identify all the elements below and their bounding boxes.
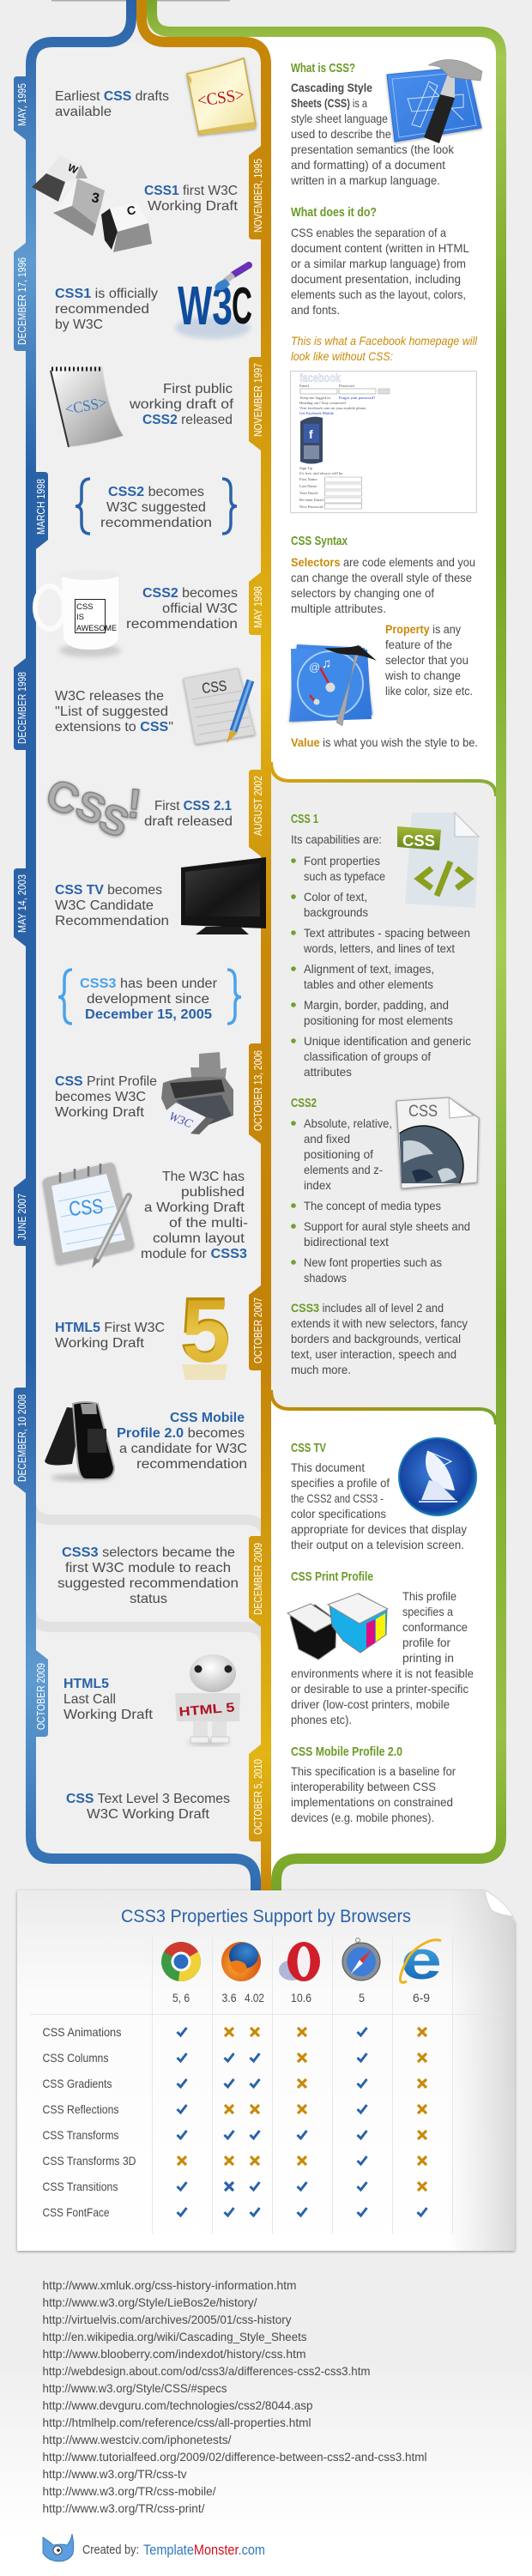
date tags: OCTOBER 13, 2006 <box>252 1050 264 1131</box>
event: CSS2 official: recommendation <box>126 617 238 632</box>
CSS mobile profile section <box>291 1745 456 1824</box>
event: multi-column layout: The W3C has <box>162 1170 245 1184</box>
CSS syntax section <box>289 534 478 749</box>
source links: http://en.wikipedia.org/wiki/Cascading_Style_Sheets <box>43 2330 307 2343</box>
icon: document with pencil: CSS <box>201 678 227 697</box>
icon: W3C logo with brush: W3 <box>178 275 233 336</box>
event: CSS1 first working draft: Working Draft <box>148 199 239 214</box>
timeline events <box>32 58 266 1822</box>
event: CSS3 selectors: status <box>130 1592 167 1606</box>
what does it do section: or a similar markup language) from <box>291 257 466 270</box>
support matrix <box>177 2028 427 2216</box>
footer credit: TemplateMonster.com <box>143 2542 265 2558</box>
CSS TV section: their output on a television screen. <box>291 1538 464 1551</box>
what is CSS section <box>290 61 455 187</box>
icon: flip phone <box>45 1402 114 1481</box>
browser version labels: 4.02 <box>245 1991 264 2005</box>
source links <box>43 2278 427 2515</box>
event: multi-column layout: a Working Draft <box>144 1200 245 1215</box>
CSS 1 capability list: attributes <box>304 1065 352 1079</box>
CSS 1 capability list: Font properties <box>304 854 380 868</box>
what is CSS section: presentation semantics (the look <box>291 142 455 156</box>
table title: CSS3 Properties Support by Browsers <box>121 1907 411 1926</box>
source links: http://www.w3.org/TR/css-tv <box>43 2467 187 2481</box>
what is CSS section: used to describe the <box>291 127 391 141</box>
CSS 1 capability list: words, letters, and lines of text <box>303 941 455 955</box>
event: earliest drafts: available <box>55 105 112 119</box>
CSS syntax section: selector that you <box>385 653 469 667</box>
event: earliest drafts <box>55 58 256 135</box>
CSS2 section: CSS2 <box>291 1096 317 1110</box>
CSS 1 capability list: classification of groups of <box>304 1049 431 1063</box>
CSS syntax section: like color, size etc. <box>385 684 473 698</box>
icon: W3C keyboard keys <box>32 155 152 252</box>
event: CSS print profile: becomes W3C <box>55 1090 146 1104</box>
what does it do section: CSS enables the separation of a <box>291 226 446 239</box>
CSS syntax section: CSS Syntax <box>291 534 348 548</box>
what is CSS section: What is CSS? <box>291 61 355 76</box>
CSS TV section: specifies a profile of <box>291 1476 390 1490</box>
event: CSS mobile profile: recommendation <box>136 1457 247 1472</box>
event: CSS1 first working draft: CSS1 first W3C <box>144 184 238 198</box>
browser version labels <box>172 1991 430 2005</box>
CSS2 capability list: index <box>304 1178 331 1192</box>
row labels <box>43 2025 136 2219</box>
source links: http://www.blooberry.com/indexdot/history/css.htm <box>43 2347 305 2361</box>
icon: printer <box>154 1052 233 1134</box>
CSS print profile section <box>287 1569 474 1726</box>
CSS print profile section: This profile <box>402 1589 456 1603</box>
source links: http://www.tutorialfeed.org/2009/02/difference-between-css2-and-css3.html <box>43 2450 427 2464</box>
icon: parchment scroll: <CSS> <box>196 86 245 111</box>
source links: http://www.devguru.com/technologies/css2/8044.asp <box>43 2398 313 2412</box>
icon: CSS file with globe <box>395 1097 481 1191</box>
CSS syntax section: wish to change <box>384 668 461 682</box>
browser version labels: 6-9 <box>413 1991 430 2005</box>
browser version labels: 5 <box>359 1991 365 2005</box>
what is CSS section: and formatting) of a document <box>291 158 445 172</box>
event: CSS2 official: CSS2 becomes <box>142 586 238 601</box>
event: CSS2 official <box>35 570 238 657</box>
event: HTML5 last call: Last Call <box>63 1692 116 1707</box>
CSS2 capability list <box>304 1116 470 1285</box>
CSS 1 section <box>291 812 479 1265</box>
facebook unstyled screenshot: Forgot your password? <box>339 396 375 400</box>
date tags: MARCH 1998 <box>35 479 47 535</box>
icon: document with pencil <box>184 668 255 744</box>
icon: robot holding HTML 5 sign <box>175 1654 240 1745</box>
facebook caption <box>291 334 478 363</box>
browser version labels: 10.6 <box>291 1991 311 2005</box>
event: multi-column layout <box>43 1163 248 1268</box>
icon: 3D CSS letters: S <box>93 795 135 847</box>
event: HTML5 first working draft: HTML5 First W3C <box>55 1321 165 1335</box>
CSS 1 capability list: tables and other elements <box>304 977 433 991</box>
event: CSS TV: Recommendation <box>55 914 169 928</box>
event: CSS3 under development: CSS3 has been under <box>80 977 218 991</box>
footer credit <box>43 2534 265 2561</box>
icon: CSS is awesome mug: CSS <box>76 602 94 612</box>
CSS3 paragraph: extends it with new selectors, fancy <box>291 1316 468 1330</box>
facebook unstyled screenshot: It's free, and always will be. <box>299 471 343 476</box>
what does it do section: document content (written in HTML <box>291 241 469 255</box>
blue timeline line <box>31 0 256 1893</box>
icon: safari <box>342 1938 380 1980</box>
panel: profiles background <box>271 1390 496 1881</box>
icon: 3D CSS letters: C <box>39 769 86 825</box>
icon: 3D CSS letters: S <box>70 782 112 834</box>
event: HTML5 last call: Working Draft <box>63 1708 154 1722</box>
CSS print profile section: phones etc). <box>291 1713 352 1726</box>
source links: http://www.xmluk.org/css-history-information.htm <box>43 2278 297 2292</box>
CSS2 capability list: bidirectional text <box>304 1235 389 1249</box>
date tags: JUNE 2007 <box>16 1194 28 1240</box>
event: CSS1 recommended <box>55 265 252 339</box>
CSS2 capability list: elements and z- <box>304 1163 383 1176</box>
event: earliest drafts: Earliest CSS drafts <box>55 89 169 104</box>
CSS syntax section: selectors by changing one of <box>291 586 434 600</box>
CSS 1 bullet dots <box>291 858 296 1265</box>
event: HTML5 last call: HTML5 <box>63 1677 109 1691</box>
what does it do section: What does it do? <box>291 205 377 220</box>
facebook unstyled screenshot: f <box>309 427 313 441</box>
date tags: DECEMBER 17, 1996 <box>16 257 28 345</box>
CSS2 capability list: Support for aural style sheets and <box>304 1219 470 1233</box>
event: CSS mobile profile: Profile 2.0 becomes <box>117 1426 245 1441</box>
source links: http://webdesign.about.com/od/css3/a/differences-css2-css3.htm <box>43 2364 371 2378</box>
CSS syntax section: multiple attributes. <box>291 602 386 615</box>
table grid <box>30 1937 502 2234</box>
CSS 1 capability list: Alignment of text, images, <box>304 962 434 976</box>
icon: CSS file with globe: CSS <box>408 1103 438 1121</box>
CSS2 capability list: Absolute, relative, <box>304 1116 392 1130</box>
event: HTML5 last call <box>63 1654 240 1745</box>
facebook unstyled screenshot <box>290 371 477 513</box>
event: CSS mobile profile: CSS Mobile <box>170 1411 245 1425</box>
event: CSS 2.1 draft: First CSS 2.1 <box>154 799 232 813</box>
event: CSS TV: CSS TV becomes <box>55 883 162 898</box>
icon: robot holding HTML 5 sign: HTML 5 <box>178 1700 235 1720</box>
facebook unstyled screenshot: Password <box>339 384 354 388</box>
facebook unstyled screenshot: New Password <box>299 505 323 509</box>
event: CSS2 suggested recommendation <box>76 479 237 534</box>
CSS print profile section: printing in <box>402 1651 454 1665</box>
CSS2 section <box>291 1096 479 1285</box>
event: CSS text level 3 <box>66 1792 230 1822</box>
icon: CSS is awesome mug: IS <box>76 613 84 622</box>
event: HTML5 first working draft <box>55 1279 231 1382</box>
event: CSS TV <box>55 857 266 934</box>
event: multi-column layout: column layout <box>153 1231 245 1246</box>
row labels: CSS Gradients <box>43 2077 112 2090</box>
event: list of suggested extensions: W3C releases the <box>55 689 164 704</box>
row labels: CSS Reflections <box>43 2102 118 2116</box>
event: CSS2 first draft <box>51 366 234 447</box>
icon: firefox <box>221 1942 261 1981</box>
facebook unstyled screenshot: Sign Up <box>299 466 313 470</box>
facebook unstyled screenshot: facebook <box>299 371 341 384</box>
row labels: CSS Transforms 3D <box>43 2154 136 2168</box>
CSS3 paragraph: CSS3 includes all of level 2 and <box>291 1301 444 1315</box>
CSS 1 capability list: Unique identification and generic <box>304 1034 471 1048</box>
icon: CSS is awesome mug: AWESOME <box>76 624 117 633</box>
CSS print profile section: or desirable to use a printer-specific <box>291 1682 469 1696</box>
event: CSS2 official: official W3C <box>162 602 238 616</box>
event: CSS2 first draft: CSS2 released <box>142 413 233 427</box>
timeline grey divider two <box>31 1607 266 1648</box>
green panel line <box>152 0 501 1893</box>
event: CSS2 suggested recommendation: recommendation <box>100 516 212 530</box>
panel: browser support sheet <box>17 1890 515 2251</box>
event: CSS mobile profile: a candidate for W3C <box>119 1442 247 1456</box>
facebook caption: This is what a Facebook homepage will <box>291 334 478 348</box>
facebook unstyled screenshot: Last Name <box>299 484 317 488</box>
what does it do section: elements such as the layout, colors, <box>291 287 466 301</box>
event: HTML5 first working draft: Working Draft <box>55 1336 145 1351</box>
icon: flat screen TV <box>181 857 266 934</box>
source links: http://www.w3.org/Style/LieBos2e/history/ <box>43 2295 257 2309</box>
CSS mobile profile section: This specification is a baseline for <box>291 1764 456 1778</box>
CSS2 capability list: and fixed <box>304 1132 350 1146</box>
CSS 1 capability list: Text attributes - spacing between <box>304 926 470 940</box>
CSS TV section: the CSS2 and CSS3 - <box>291 1491 384 1505</box>
facebook unstyled screenshot: Get Facebook Mobile <box>299 411 334 415</box>
row labels: CSS Transitions <box>43 2180 118 2193</box>
icon: blueprint compass and T-square <box>289 644 377 726</box>
icon: W3C logo with brush: C <box>232 277 252 335</box>
source links: http://www.w3.org/TR/css-print/ <box>43 2501 205 2515</box>
icon: blueprint and hammer <box>387 59 482 143</box>
CSS syntax section: Property is any <box>385 622 461 636</box>
event: CSS print profile <box>55 1052 233 1134</box>
separator: grey to white panel <box>271 1390 496 1424</box>
CSS TV section <box>291 1438 476 1551</box>
event: CSS2 first draft: First public <box>163 382 233 396</box>
icon: monster mascot <box>43 2534 74 2561</box>
CSS mobile profile section: CSS Mobile Profile 2.0 <box>291 1745 402 1759</box>
panel: what is CSS background <box>245 37 496 794</box>
icon: W3C keyboard keys: C <box>125 203 137 218</box>
date tags: OCTOBER 5, 2010 <box>252 1759 264 1835</box>
CSS 1 capability list <box>303 854 471 1079</box>
CSS print profile section: conformance <box>402 1620 468 1634</box>
facebook unstyled screenshot: Your Email <box>299 491 318 495</box>
CSS print profile section: CSS Print Profile <box>291 1569 373 1584</box>
facebook unstyled screenshot: Re-enter Email <box>299 498 324 502</box>
date tags: OCTOBER 2007 <box>252 1297 264 1364</box>
CSS 1 capability list: Color of text, <box>304 890 367 904</box>
CSS2 capability list: New font properties such as <box>304 1255 442 1269</box>
icon: blue braces <box>76 479 237 534</box>
CSS mobile profile section: implementations on constrained <box>291 1795 453 1809</box>
icon: printer: W3C <box>167 1110 195 1131</box>
orange timeline line <box>142 0 266 1893</box>
icon: gold 3D five: 5 <box>182 1282 230 1382</box>
event: list of suggested extensions: extensions to CSS" <box>55 720 173 735</box>
icon: W3C keyboard keys: 3 <box>90 190 100 207</box>
event: CSS1 recommended: by W3C <box>55 317 103 332</box>
event: CSS 2.1 draft <box>39 769 233 847</box>
event: CSS2 suggested recommendation: CSS2 becomes <box>108 485 204 499</box>
icon: blueprint compass and T-square: @ <box>309 661 320 674</box>
icon: opera <box>279 1942 320 1981</box>
icon: notepad with pen <box>43 1163 134 1268</box>
CSS print profile section: specifies a <box>402 1605 453 1618</box>
right column content <box>287 59 482 1824</box>
CSS2 capability list: The concept of media types <box>304 1199 441 1212</box>
event: list of suggested extensions: "List of suggested <box>55 704 168 719</box>
icon: light blue braces <box>58 970 241 1024</box>
CSS print profile section: profile for <box>402 1636 450 1649</box>
event: CSS3 under development: December 15, 2005 <box>85 1007 212 1022</box>
CSS mobile profile section: devices (e.g. mobile phones). <box>291 1811 434 1824</box>
CSS TV section: CSS TV <box>291 1441 326 1455</box>
CSS 1 capability list: backgrounds <box>304 905 368 919</box>
date tags: DECEMBER 1998 <box>16 672 28 744</box>
date tags: MAY, 1995 <box>16 83 28 126</box>
event: multi-column layout: module for CSS3 <box>141 1247 247 1261</box>
row labels: CSS Columns <box>43 2051 108 2065</box>
event: CSS2 suggested recommendation: W3C suggested <box>106 500 206 515</box>
icon: ink cartridges <box>287 1593 388 1660</box>
timeline grey divider one <box>31 1500 266 1540</box>
event: CSS1 recommended: recommended <box>55 302 149 317</box>
facebook unstyled screenshot: Email <box>299 384 310 388</box>
date tags: MAY 14, 2003 <box>16 874 28 933</box>
event: CSS3 selectors: first W3C module to reach <box>65 1561 231 1575</box>
CSS3 paragraph: borders and backgrounds, vertical <box>291 1332 461 1345</box>
event: CSS3 selectors: suggested recommendation <box>57 1576 239 1591</box>
date tags: MAY 1998 <box>252 586 264 628</box>
event: CSS1 first working draft <box>32 155 239 252</box>
what is CSS section: Sheets (CSS) is a <box>291 96 367 110</box>
event: CSS3 under development: development since <box>87 992 209 1007</box>
icon: CSS file with code tag <box>397 813 479 908</box>
what is CSS section: style sheet language <box>291 112 388 125</box>
facebook caption: look like without CSS: <box>291 349 393 363</box>
event: CSS3 selectors <box>57 1545 239 1606</box>
CSS syntax section: Selectors are code elements and you <box>291 555 475 569</box>
date tags: AUGUST 2002 <box>252 776 264 836</box>
CSS 1 section: CSS 1 <box>291 812 318 826</box>
CSS3 paragraph <box>291 1301 468 1376</box>
CSS3 paragraph: much more. <box>291 1363 351 1376</box>
facebook unstyled screenshot: Visit facebook.com on your mobile phone. <box>299 406 366 410</box>
row labels: CSS Transforms <box>43 2128 118 2142</box>
event: CSS 2.1 draft: draft released <box>144 814 233 829</box>
CSS TV section: appropriate for devices that display <box>291 1522 467 1536</box>
icon: parchment scroll <box>187 58 256 135</box>
row labels: CSS Animations <box>43 2025 122 2039</box>
what does it do section: and fonts. <box>291 303 340 317</box>
browser version labels: 5, 6 <box>172 1991 190 2005</box>
event: CSS text level 3: W3C Working Draft <box>87 1807 210 1822</box>
CSS TV section: This document <box>291 1460 365 1474</box>
icon: chrome <box>161 1942 201 1981</box>
event: CSS2 first draft: working draft of <box>129 397 234 412</box>
CSS 1 section: Its capabilities are: <box>291 832 382 846</box>
icon: CSS file with code tag: CSS <box>402 832 435 850</box>
source links: http://htmlhelp.com/reference/css/all-properties.html <box>43 2416 311 2429</box>
event: CSS TV: W3C Candidate <box>55 898 154 913</box>
icon: 3D CSS letters: ! <box>125 781 143 828</box>
footer credit: Created by: <box>82 2543 139 2557</box>
date tags: OCTOBER 2009 <box>35 1663 47 1730</box>
event: list of suggested extensions <box>55 668 255 744</box>
CSS syntax section: can change the overall style of these <box>291 571 472 584</box>
browser version labels: 3.6 <box>221 1991 237 2005</box>
event: multi-column layout: of the multi- <box>169 1216 248 1231</box>
CSS2 capability list: positioning of <box>304 1147 373 1161</box>
icon: internet explorer: e <box>401 1929 442 1991</box>
icon: spiral notepad <box>51 366 124 447</box>
icon: W3C keyboard keys: W <box>66 161 81 177</box>
date tags: NOVEMBER 1997 <box>252 363 264 437</box>
event: CSS text level 3: CSS Text Level 3 Becomes <box>66 1792 230 1806</box>
source links: http://www.w3.org/Style/CSS/#specs <box>43 2381 227 2395</box>
icon: satellite dish button <box>399 1438 476 1515</box>
facebook unstyled screenshot: Keep me logged in <box>300 396 331 400</box>
event: CSS print profile: CSS Print Profile <box>55 1074 157 1089</box>
CSS mobile profile section: interoperability between CSS <box>291 1780 436 1793</box>
CSS 1 capability list: such as typeface <box>304 869 385 883</box>
row labels: CSS FontFace <box>43 2205 110 2219</box>
date tags: NOVEMBER, 1995 <box>252 159 264 233</box>
facebook unstyled screenshot: First Name <box>299 477 317 481</box>
icon: gold 3D five: 5 <box>179 1279 231 1380</box>
CSS 1 capability list: positioning for most elements <box>304 1013 453 1027</box>
source links: http://www.w3.org/TR/css-mobile/ <box>43 2484 216 2498</box>
what does it do section: document presentation, including <box>291 272 461 286</box>
CSS2 capability list: shadows <box>304 1271 347 1285</box>
icon: notepad with pen: CSS <box>68 1195 104 1221</box>
source links: http://virtuelvis.com/archives/2005/01/css-history <box>43 2313 292 2326</box>
CSS syntax section: feature of the <box>385 638 452 651</box>
top sheet shadow <box>51 0 230 2</box>
date tags: DECEMBER, 10 2008 <box>16 1394 28 1482</box>
event: CSS1 recommended: CSS1 is officially <box>55 287 158 301</box>
CSS TV section: color specifications <box>291 1507 386 1521</box>
event: multi-column layout: published <box>181 1185 245 1200</box>
date tags <box>14 76 264 1841</box>
icon: 3D CSS letters <box>39 769 143 847</box>
CSS 1 capability list: Margin, border, padding, and <box>304 998 449 1012</box>
facebook unstyled screenshot: Heading out? Stay connected <box>299 401 346 405</box>
icon: spiral notepad: <CSS> <box>63 394 108 418</box>
source links: http://www.westciv.com/iphonetests/ <box>43 2433 232 2446</box>
CSS print profile section: driver (low-cost printers, mobile <box>291 1697 450 1711</box>
CSS print profile section: environments where it is not feasible <box>291 1666 474 1680</box>
CSS3 paragraph: text, user interaction, speech and <box>291 1347 456 1361</box>
what is CSS section: Cascading Style <box>291 81 372 94</box>
what does it do section <box>291 205 469 317</box>
separator: white to grey panel <box>271 762 496 796</box>
panel: timeline background <box>31 42 266 1859</box>
event: CSS3 selectors: CSS3 selectors became the <box>62 1545 235 1560</box>
event: CSS3 under development <box>58 970 241 1024</box>
event: CSS mobile profile <box>45 1402 247 1481</box>
CSS syntax section: Value is what you wish the style to be. <box>291 735 478 749</box>
icon: CSS is awesome mug <box>35 570 121 657</box>
what is CSS section: written in a markup language. <box>290 173 440 187</box>
icon: blueprint compass and T-square: ♫ <box>322 656 331 671</box>
date tags: DECEMBER 2009 <box>252 1543 264 1615</box>
event: CSS print profile: Working Draft <box>55 1105 145 1120</box>
